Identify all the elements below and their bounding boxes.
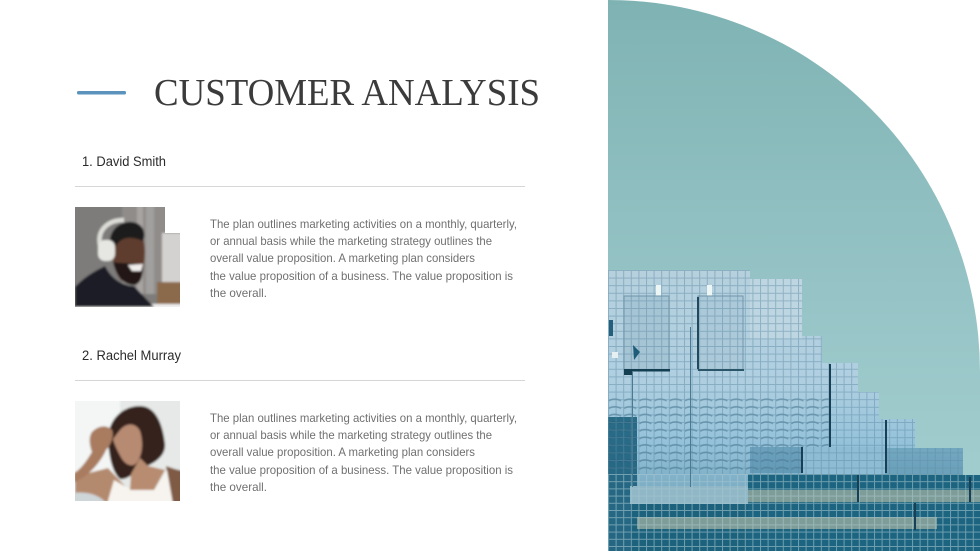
customer 2 description: overall value proposition. A marketing plan considers [210,445,475,459]
customer 1 description: or annual basis while the marketing strategy outlines the [210,234,492,248]
customer 2 name: 2. Rachel Murray [82,348,181,363]
customer 2 description: the value proposition of a business. The value proposition is [210,463,513,477]
customer 1 description: the overall. [210,286,267,300]
hero image: glass skyscraper [608,270,980,551]
customer 2 description: The plan outlines marketing activities on a monthly, quarterly, [210,411,517,425]
customer 1 description: The plan outlines marketing activities on a monthly, quarterly, [210,217,517,231]
title: CUSTOMER ANALYSIS [154,72,540,114]
customer 2 description: the overall. [210,480,267,494]
photo: Rachel Murray [75,401,180,501]
title accent line [77,91,126,94]
customer 1 description [210,217,517,300]
customer 1 name: 1. David Smith [82,154,166,169]
customer 1 description: the value proposition of a business. The value proposition is [210,269,513,283]
customer 2 description [210,411,517,494]
photo: David Smith [75,207,180,307]
customer 1 description: overall value proposition. A marketing plan considers [210,251,475,265]
customer 2 description: or annual basis while the marketing strategy outlines the [210,428,492,442]
hero image: teal quarter circle [608,0,980,551]
